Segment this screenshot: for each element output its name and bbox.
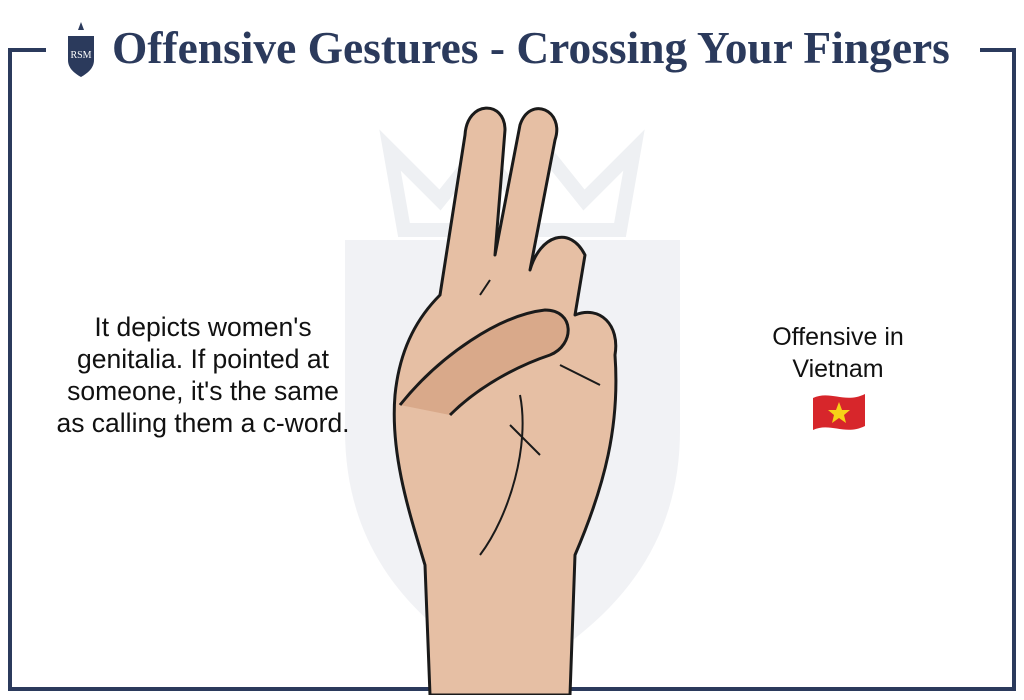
text: description: It depicts women's [94, 312, 312, 342]
icon: logo shield [68, 22, 94, 77]
icon: Vietnam flag [813, 394, 865, 430]
text: description: genitalia. If pointed at [77, 344, 329, 374]
text: description: someone, it's the same [67, 376, 339, 406]
text: country: Vietnam [792, 355, 884, 383]
text: description: as calling them a c-word. [56, 408, 350, 438]
text: country: Offensive in [772, 323, 904, 351]
text: description [56, 312, 350, 438]
watermark shield [345, 150, 680, 680]
title: Offensive Gestures - Crossing Your Fingers [112, 23, 950, 73]
illustration: crossed fingers hand [392, 106, 618, 695]
text: country [772, 323, 904, 383]
icon: logo shield: RSM [70, 50, 92, 61]
